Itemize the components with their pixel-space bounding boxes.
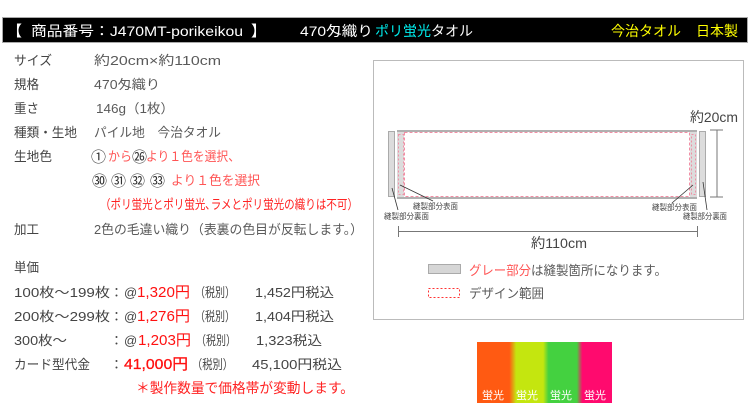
spec list: ㉛: [111, 173, 126, 190]
height dimension: [690, 109, 738, 197]
price table: カード型代金: [14, 357, 90, 372]
spec list: ㉖: [132, 149, 147, 166]
spec list: ㉝: [150, 173, 165, 190]
seam labels: 縫製部分表面: [413, 201, 458, 211]
spec list: 470匁織り: [94, 77, 160, 92]
panel: towel diagram: [374, 60, 744, 320]
legend: は縫製箇所になります。: [531, 263, 667, 278]
seam labels: 縫製部分表面: [652, 202, 697, 212]
fluorescent colour swatches: [477, 342, 612, 403]
price table: @: [124, 285, 137, 300]
spec list: 146g（1枚）: [96, 101, 174, 116]
fluorescent colour swatches: 蛍光: [584, 388, 606, 402]
height dimension: 約20cm: [690, 109, 738, 125]
price table: @: [124, 309, 137, 324]
price table: 300枚～: [14, 333, 67, 348]
price table: @: [124, 333, 137, 348]
spec list: ㉜: [130, 173, 145, 190]
price table: 41,000円: [124, 356, 188, 373]
header bar: タオル: [431, 23, 473, 39]
spec list: 約20cm×約110cm: [94, 53, 221, 68]
legend: グレー部分: [469, 263, 531, 278]
price table: 45,100円税込: [252, 357, 342, 372]
back seam strips: [388, 132, 706, 196]
spec list: サイズ: [14, 53, 52, 68]
spec list: 加工: [14, 222, 39, 237]
header bar: 今治タオル: [611, 23, 681, 39]
spec list: より１色を選択、: [146, 149, 240, 164]
seam labels: 縫製部分裏面: [384, 211, 429, 221]
note: price band: ＊製作数量で価格帯が変動します。: [136, 380, 354, 396]
price table: （税別）: [195, 309, 235, 324]
legend: デザイン範囲: [469, 286, 544, 301]
price table: ：: [110, 333, 123, 348]
price table: 1,452円税込: [255, 285, 334, 300]
legend: [428, 263, 667, 301]
width dimension: 約110cm: [531, 235, 587, 251]
fluorescent colour swatches: 蛍光: [550, 388, 572, 402]
header bar: 【: [7, 23, 22, 40]
header bar: [2, 18, 748, 42]
header bar: 日本製: [696, 23, 738, 39]
spec list: 生地色: [14, 149, 52, 164]
spec list: （ポリ蛍光とポリ蛍光､ラメとポリ蛍光の織りは不可）: [100, 197, 358, 212]
leader lines: [392, 182, 707, 210]
price table: 1,203円: [138, 332, 191, 349]
seam labels: 縫製部分裏面: [683, 211, 727, 221]
spec list: 重さ: [14, 101, 39, 116]
price table: 200枚～299枚: [14, 309, 110, 324]
price table: 1,323税込: [256, 333, 322, 348]
width dimension: [398, 226, 698, 251]
spec list: 種類・生地: [14, 125, 77, 140]
spec list: ㉚: [92, 173, 107, 190]
header bar: 】: [251, 23, 266, 40]
price table: [14, 260, 342, 373]
seam labels: [384, 201, 727, 221]
price table: 1,276円: [137, 308, 190, 325]
price table: 100枚～199枚: [14, 285, 110, 300]
header bar: 470匁織り: [300, 23, 373, 39]
price table: 単価: [14, 260, 39, 275]
spec list: [14, 53, 363, 237]
price table: ：: [110, 309, 123, 324]
price table: 1,320円: [137, 284, 190, 301]
price table: ：: [110, 357, 123, 372]
price table: ：: [110, 285, 123, 300]
spec list: より１色を選択: [171, 173, 260, 188]
price table: 1,404円税込: [255, 309, 334, 324]
price table: （税別）: [196, 333, 236, 348]
fluorescent colour swatches: 蛍光: [482, 388, 504, 402]
header bar: ポリ蛍光: [375, 23, 431, 39]
fluorescent colour swatches: 蛍光: [516, 388, 538, 402]
header bar: 商品番号：J470MT-porikeikou: [31, 23, 243, 39]
towel body: [397, 130, 697, 199]
spec list: 規格: [14, 77, 39, 92]
spec list: 2色の毛違い織り（表裏の色目が反転します。）: [94, 222, 363, 237]
price table: （税別）: [192, 357, 233, 372]
spec list: から: [108, 149, 132, 164]
spec list: パイル地 今治タオル: [94, 125, 221, 140]
spec list: ①: [91, 149, 106, 166]
price table: （税別）: [195, 285, 235, 300]
